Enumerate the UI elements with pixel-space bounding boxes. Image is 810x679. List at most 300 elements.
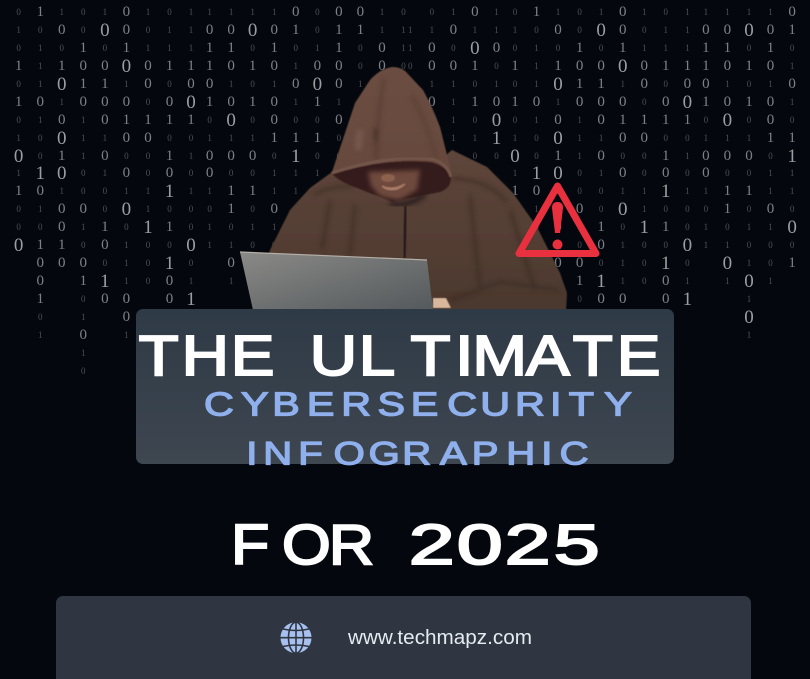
binary rain: right tile: 0 [576, 327, 583, 343]
binary rain: left tile: 0 [189, 222, 193, 232]
binary rain: left tile: 0 [186, 235, 196, 256]
binary rain: right tile: 1 [661, 253, 671, 274]
binary rain: right tile: 1 [620, 79, 625, 89]
binary rain: left tile: 1 [103, 7, 107, 17]
binary rain: right tile: 0 [683, 92, 692, 113]
binary rain: right tile: 1 [619, 40, 626, 56]
binary rain: left tile: 0 [167, 133, 172, 143]
binary rain: left tile: 0 [294, 204, 298, 214]
binary rain: left tile: 1 [80, 76, 87, 92]
face [368, 170, 420, 201]
binary rain: left tile: 0 [401, 7, 406, 17]
binary rain: right tile: 1 [724, 40, 731, 56]
binary rain: left tile: 0 [166, 291, 173, 307]
hooded hacker figure [240, 67, 567, 312]
binary rain: left tile: 0 [270, 112, 278, 128]
binary rain: left tile: 0 [167, 240, 172, 250]
binary rain: right tile: 1 [532, 163, 541, 184]
binary rain: middle strip: 1 [451, 7, 456, 17]
binary rain: right tile: 0 [662, 165, 670, 181]
binary rain: left tile: 0 [124, 150, 129, 160]
hood seam and shading [358, 78, 438, 165]
binary rain: left tile: 1 [401, 43, 406, 53]
binary rain: left tile: 1 [358, 79, 363, 89]
binary rain: left tile: 0 [57, 128, 66, 149]
binary rain: left tile: 1 [229, 133, 233, 143]
binary rain: left tile: 0 [248, 20, 257, 41]
binary rain: right tile: 1 [577, 115, 582, 125]
binary rain: right tile: 1 [576, 76, 583, 92]
binary rain: left tile: 1 [16, 25, 21, 35]
binary rain: left tile: 0 [122, 199, 131, 220]
binary rain: right tile: 0 [596, 20, 606, 41]
binary rain: middle strip: 1 [430, 79, 434, 89]
binary rain: middle strip: 0 [473, 79, 477, 89]
binary rain: left tile: 1 [58, 148, 66, 164]
binary rain: right tile: 1 [725, 240, 730, 250]
binary rain: right tile: 1 [642, 7, 646, 17]
binary rain: right tile: 0 [704, 115, 708, 125]
binary rain: middle strip: 0 [470, 38, 480, 59]
binary rain: left tile: 0 [123, 291, 130, 307]
heading: FOR 2025 [231, 513, 600, 577]
binary rain: left tile: 0 [378, 40, 386, 56]
binary rain: left tile: 0 [14, 235, 23, 256]
hood opening [332, 161, 451, 202]
binary rain: right tile: 1 [599, 133, 603, 143]
binary rain: left tile: 1 [38, 79, 42, 89]
binary rain: left tile: 0 [101, 148, 109, 164]
binary rain: left tile: 0 [81, 186, 86, 196]
binary rain: left tile: 0 [189, 204, 193, 214]
binary rain: right tile: 0 [724, 58, 731, 74]
binary rain: right tile: 0 [513, 115, 517, 125]
binary rain: left tile: 1 [229, 7, 233, 17]
binary rain: left tile: 1 [38, 61, 42, 71]
binary rain: left tile: 0 [187, 76, 195, 92]
binary rain: right tile: 1 [685, 43, 690, 53]
binary rain: left tile: 1 [314, 94, 321, 110]
binary rain: right tile: 0 [790, 115, 794, 125]
binary rain: right tile: 0 [662, 94, 670, 110]
binary rain: right tile: 1 [704, 7, 708, 17]
binary rain: left tile: 0 [57, 74, 66, 95]
binary rain: left tile: 0 [123, 4, 130, 20]
binary rain: left tile: 0 [81, 7, 86, 17]
binary rain: left tile: 1 [249, 183, 256, 199]
binary rain: right tile: 0 [619, 165, 626, 181]
binary rain: right tile: 0 [554, 22, 562, 38]
binary rain: middle strip: 1 [451, 97, 456, 107]
binary rain: right tile: 0 [554, 201, 562, 217]
binary rain: left tile: 0 [313, 74, 322, 95]
binary rain: left tile: 1 [60, 97, 64, 107]
binary rain: right tile: 1 [768, 168, 773, 178]
binary rain: right tile: 0 [747, 79, 751, 89]
binary rain: right tile: 1 [533, 291, 540, 307]
binary rain: right tile: 0 [664, 204, 668, 214]
binary rain: right tile: 0 [597, 58, 605, 74]
binary rain: right tile: 0 [534, 150, 539, 160]
binary rain: right tile: 1 [597, 219, 605, 235]
binary rain: left tile: 1 [250, 222, 255, 232]
binary rain: left tile: 1 [15, 58, 22, 74]
binary rain: right tile: 0 [640, 130, 648, 146]
subtitle: INFOGRAPHIC: INFOGRAPHIC [246, 435, 589, 472]
binary rain: left tile: 1 [335, 40, 343, 56]
binary rain: right tile: 0 [642, 258, 646, 268]
triangle outline [519, 186, 596, 254]
binary rain: middle strip: 0 [473, 150, 477, 160]
binary rain: right tile: 0 [767, 112, 774, 128]
binary rain: left tile: 0 [167, 79, 172, 89]
binary rain: middle strip: 1 [494, 79, 499, 89]
binary rain: left tile: 1 [335, 22, 343, 38]
binary rain: left tile: 0 [226, 110, 236, 131]
binary rain: right tile: 0 [577, 186, 582, 196]
binary rain: right tile: 0 [534, 312, 539, 322]
binary rain: right tile: 0 [724, 94, 731, 110]
binary rain: right tile: 1 [511, 183, 519, 199]
binary rain: left tile: 0 [227, 22, 235, 38]
binary rain: left tile: 0 [146, 240, 150, 250]
binary rain: left tile: 0 [80, 327, 87, 343]
binary rain: right tile: 1 [661, 181, 671, 202]
binary rain: right tile: 1 [554, 148, 562, 164]
binary rain: left tile: 0 [38, 150, 42, 160]
binary rain: left tile: 1 [229, 240, 233, 250]
binary rain: right tile: 0 [683, 235, 692, 256]
binary rain: left tile: 1 [206, 58, 213, 74]
binary rain: left tile: 1 [315, 43, 320, 53]
binary rain: left tile: 1 [294, 97, 298, 107]
binary rain: right tile: 1 [790, 61, 794, 71]
binary rain: right tile: 1 [554, 237, 562, 253]
binary rain: left tile: 1 [123, 112, 130, 128]
icon: globe [280, 622, 312, 653]
binary rain: left tile: 0 [272, 150, 276, 160]
binary rain: left tile: 0 [36, 183, 44, 199]
binary rain: left tile: 1 [206, 40, 213, 56]
laptop [240, 252, 433, 310]
binary rain: left tile: 1 [81, 312, 86, 322]
binary rain: right tile: 1 [577, 133, 582, 143]
binary rain: left tile: 1 [315, 168, 320, 178]
binary rain: left tile: 0 [38, 133, 42, 143]
binary rain: left tile: 1 [165, 253, 174, 274]
binary rain: left tile: 0 [270, 94, 278, 110]
binary rain: left tile: 0 [272, 240, 276, 250]
binary rain: right tile: 0 [533, 273, 540, 289]
binary rain: left tile: 1 [207, 240, 212, 250]
binary rain: left tile: 1 [124, 330, 129, 340]
binary rain: left tile: 0 [146, 258, 150, 268]
binary rain: left tile: 0 [335, 58, 343, 74]
binary rain: left tile: 0 [337, 133, 341, 143]
hood [332, 67, 451, 183]
binary rain: right tile: 0 [768, 150, 773, 160]
binary rain: left tile: 1 [272, 186, 276, 196]
binary rain: right tile: 1 [685, 25, 690, 35]
binary rain: right tile: 1 [511, 94, 519, 110]
binary rain: left tile: 0 [16, 115, 21, 125]
binary rain: right tile: 1 [639, 217, 649, 238]
binary rain: left tile: 0 [58, 112, 66, 128]
binary rain: right tile: 0 [533, 255, 540, 271]
binary rain: right tile: 0 [577, 7, 582, 17]
binary rain: right tile: 1 [725, 276, 730, 286]
binary rain: left tile: 0 [401, 61, 406, 71]
binary rain: left tile: 0 [166, 94, 173, 110]
binary rain: right tile: 1 [747, 7, 751, 17]
binary rain: left tile: 1 [207, 186, 212, 196]
binary rain: right tile: 0 [790, 204, 794, 214]
binary rain: left tile: 0 [337, 150, 341, 160]
binary rain: middle strip: 0 [471, 4, 479, 20]
binary rain: right tile: 1 [790, 186, 794, 196]
binary rain: right tile: 0 [685, 204, 690, 214]
binary rain: left tile: 1 [189, 276, 193, 286]
binary rain: right tile: 1 [554, 58, 562, 74]
binary rain: left tile: 1 [272, 222, 276, 232]
binary rain: left tile: 1 [270, 130, 278, 146]
binary rain: right tile: 0 [685, 168, 690, 178]
binary rain: right tile: 0 [599, 204, 603, 214]
binary rain: middle strip: 1 [492, 128, 501, 149]
binary rain: middle strip: 0 [493, 94, 500, 110]
binary rain: right tile: 1 [768, 276, 773, 286]
collar [390, 195, 425, 204]
binary rain: right tile: 1 [642, 186, 646, 196]
binary rain: right tile: 0 [534, 25, 539, 35]
binary rain: right tile: 1 [790, 168, 794, 178]
binary rain: right tile: 0 [702, 76, 710, 92]
binary rain: left tile: 1 [146, 7, 150, 17]
binary rain: right tile: 0 [747, 115, 751, 125]
binary rain: left tile: 0 [227, 58, 235, 74]
laptop edge [240, 252, 427, 260]
binary rain: left tile: 0 [335, 112, 343, 128]
binary rain: right tile: 1 [533, 4, 540, 20]
binary rain: right tile: 1 [685, 150, 690, 160]
binary rain: left tile: 1 [292, 22, 300, 38]
binary rain: right tile: 0 [618, 199, 627, 220]
binary rain: right tile: 0 [513, 43, 517, 53]
binary rain: right tile: 1 [725, 79, 730, 89]
binary rain: right tile: 1 [664, 43, 668, 53]
binary rain: left tile: 1 [314, 130, 321, 146]
binary rain: left tile: 0 [227, 255, 235, 271]
binary rain: left tile: 1 [294, 186, 298, 196]
binary rain: left tile: 1 [207, 133, 212, 143]
binary rain: right tile: 0 [723, 110, 732, 131]
binary rain: right tile: 0 [619, 309, 626, 325]
binary rain: left tile: 1 [249, 58, 256, 74]
binary rain: right tile: 0 [553, 163, 563, 184]
binary rain: right tile: 1 [787, 146, 797, 166]
binary rain: middle strip [408, 4, 501, 160]
binary rain: right tile: 0 [533, 94, 540, 110]
binary rain: left tile: 1 [124, 79, 129, 89]
exclamation bar [552, 202, 563, 233]
word: FOR: FOR [231, 513, 374, 576]
binary rain: right tile: 0 [744, 20, 754, 41]
binary rain: left tile: 0 [103, 204, 107, 214]
binary rain: left tile: 1 [270, 40, 278, 56]
binary rain: right tile: 0 [534, 222, 539, 232]
binary rain: left tile: 0 [81, 25, 86, 35]
binary rain: right tile: 0 [788, 4, 796, 20]
binary rain: middle strip: 0 [450, 58, 457, 74]
binary rain: left tile: 1 [189, 7, 193, 17]
binary rain: left tile: 0 [357, 4, 364, 20]
binary rain: right tile: 1 [664, 25, 668, 35]
binary rain: left tile: 0 [189, 258, 193, 268]
binary rain: left tile: 0 [146, 25, 150, 35]
binary rain: right tile: 1 [534, 204, 539, 214]
binary rain: left tile: 0 [315, 25, 320, 35]
binary rain: left tile: 1 [38, 330, 42, 340]
binary rain: left tile: 1 [38, 43, 42, 53]
binary rain: left tile: 1 [250, 7, 255, 17]
binary rain: right tile: 1 [745, 94, 753, 110]
binary rain: left tile: 0 [249, 148, 256, 164]
binary rain: right tile: 0 [685, 258, 690, 268]
binary rain: left tile [14, 4, 406, 376]
binary rain: right tile: 1 [556, 7, 560, 17]
website address: www.techmapz.com [347, 627, 532, 649]
binary rain: left tile: 0 [36, 273, 44, 289]
binary rain: right tile: 0 [725, 222, 730, 232]
binary rain: right tile: 1 [768, 186, 773, 196]
binary rain: left tile: 1 [81, 115, 86, 125]
binary rain: right tile: 1 [513, 168, 517, 178]
binary rain: right tile: 0 [664, 240, 668, 250]
binary rain: middle strip: 0 [430, 7, 434, 17]
binary rain: left tile: 0 [167, 204, 172, 214]
binary rain: right tile: 0 [704, 204, 708, 214]
binary rain: right tile: 1 [684, 112, 691, 128]
binary rain: right tile: 0 [662, 273, 670, 289]
binary rain: right tile: 1 [768, 7, 773, 17]
binary rain: left tile: 0 [294, 115, 298, 125]
binary rain: left tile: 1 [36, 4, 44, 20]
binary rain: left tile: 1 [380, 7, 384, 17]
binary rain: left tile: 0 [315, 115, 320, 125]
binary rain: right tile: 0 [768, 240, 773, 250]
alert triangle icon [519, 186, 596, 254]
binary rain: middle strip: 1 [494, 25, 499, 35]
binary rain: right tile: 1 [767, 130, 774, 146]
binary rain: left tile: 1 [207, 7, 212, 17]
binary rain: left tile: 0 [101, 112, 109, 128]
binary rain: left tile: 1 [36, 237, 44, 253]
binary rain: right tile: 1 [747, 258, 751, 268]
binary rain: left tile: 1 [272, 79, 276, 89]
binary rain: right tile: 1 [640, 112, 648, 128]
binary rain: middle strip: 1 [471, 58, 479, 74]
binary rain: right tile: 1 [768, 79, 773, 89]
binary rain: right tile: 0 [724, 22, 731, 38]
binary rain: left tile: 1 [187, 58, 195, 74]
binary rain: left tile: 1 [100, 271, 110, 292]
binary rain: left tile: 1 [124, 258, 129, 268]
binary rain: right tile: 0 [597, 148, 605, 164]
binary rain: left tile: 1 [166, 112, 173, 128]
binary rain: right tile: 1 [577, 150, 582, 160]
binary rain: right tile: 0 [642, 168, 646, 178]
binary rain: left tile: 1 [272, 7, 276, 17]
binary rain: right tile: 1 [576, 40, 583, 56]
binary rain: middle strip: 1 [451, 79, 456, 89]
binary rain: right tile: 0 [553, 128, 563, 149]
binary rain: right tile: 1 [704, 222, 708, 232]
binary rain: middle strip: 1 [430, 25, 434, 35]
binary rain: right tile: 0 [702, 165, 710, 181]
binary rain: left tile: 1 [144, 112, 152, 128]
binary rain: left tile: 1 [380, 25, 384, 35]
binary rain: right tile: 0 [618, 56, 627, 77]
binary rain: left tile: 1 [229, 79, 233, 89]
binary rain: right tile: 1 [534, 330, 539, 340]
binary rain: right tile: 0 [768, 258, 773, 268]
binary rain: right tile: 1 [556, 97, 560, 107]
binary rain: left tile: 0 [250, 79, 255, 89]
binary rain: right tile: 1 [662, 148, 670, 164]
binary rain: left tile: 0 [36, 94, 44, 110]
binary rain: middle strip: 0 [428, 40, 436, 56]
binary rain: right tile: 1 [747, 294, 751, 304]
binary rain: right tile: 1 [511, 58, 519, 74]
binary rain: left tile: 1 [124, 240, 129, 250]
binary rain: right tile: 1 [620, 258, 625, 268]
binary rain: right tile: 0 [767, 58, 774, 74]
binary rain: right tile: 0 [599, 258, 603, 268]
binary rain: left tile: 0 [227, 94, 235, 110]
binary rain: right tile: 1 [599, 168, 603, 178]
binary rain: left tile: 0 [291, 217, 301, 238]
binary rain: middle strip: 0 [493, 40, 500, 56]
binary rain: right tile: 0 [577, 294, 582, 304]
binary rain: left tile: 0 [16, 204, 21, 214]
binary rain: left tile: 0 [250, 115, 255, 125]
binary rain: right tile: 0 [642, 97, 646, 107]
binary rain: right tile: 1 [685, 186, 690, 196]
binary rain: left tile: 0 [16, 222, 21, 232]
binary rain: right tile: 0 [554, 112, 562, 128]
binary rain: left tile: 1 [81, 150, 86, 160]
binary rain: left tile: 0 [16, 7, 21, 17]
binary rain: middle strip: 0 [451, 43, 456, 53]
binary rain: left tile: 0 [81, 240, 86, 250]
binary rain: left tile: 0 [250, 240, 255, 250]
binary rain: left tile: 0 [229, 168, 233, 178]
binary rain: left tile: 0 [294, 240, 298, 250]
binary rain: left tile: 1 [189, 25, 193, 35]
binary rain: right tile: 1 [788, 130, 796, 146]
binary rain: right tile: 1 [513, 25, 517, 35]
binary rain: left tile: 0 [101, 237, 109, 253]
binary rain: left tile: 0 [58, 219, 66, 235]
binary rain: right tile: 0 [619, 130, 626, 146]
binary rain: left tile: 0 [270, 58, 278, 74]
binary rain: right tile: 0 [577, 240, 582, 250]
binary rain: left tile: 0 [207, 204, 212, 214]
binary rain: right tile: 0 [533, 183, 540, 199]
binary rain: left tile: 1 [58, 58, 66, 74]
binary rain: right tile: 0 [619, 94, 626, 110]
binary rain: left tile: 0 [80, 255, 87, 271]
